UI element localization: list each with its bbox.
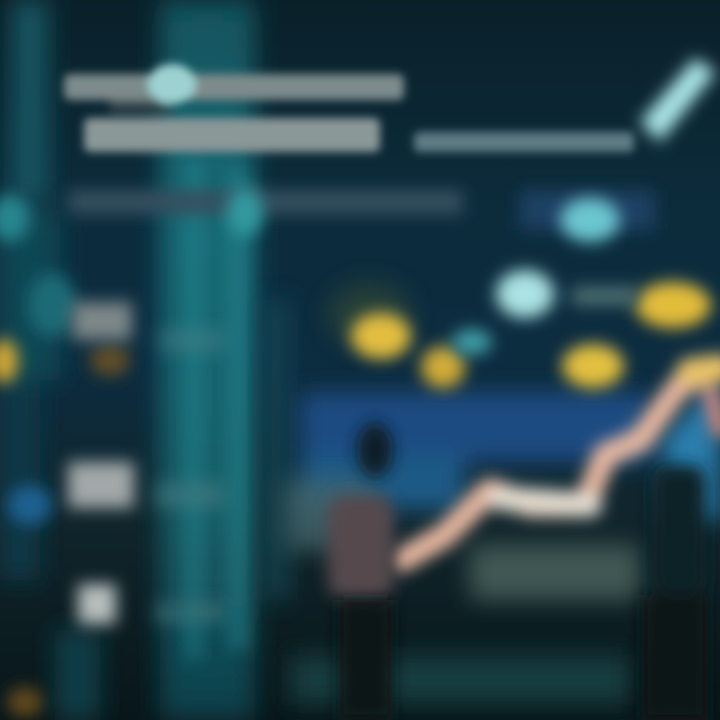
pale cyan nodes — [452, 270, 637, 355]
chart right blue area — [660, 380, 720, 520]
lower dark band with chart base — [285, 480, 640, 705]
blue chart panel — [300, 392, 650, 510]
right silhouette — [642, 465, 708, 720]
person silhouette — [328, 422, 394, 720]
grey-white text blocks left — [68, 302, 225, 624]
line chart — [402, 368, 720, 560]
yellow coins — [0, 282, 711, 717]
subtitle — [68, 190, 655, 230]
left teal orbs — [0, 188, 263, 525]
icon: light pen stroke — [640, 58, 716, 142]
left column — [0, 0, 100, 720]
yellow halo — [328, 283, 412, 347]
central tower — [160, 0, 290, 720]
cyan badge — [560, 198, 620, 242]
title — [64, 64, 634, 152]
